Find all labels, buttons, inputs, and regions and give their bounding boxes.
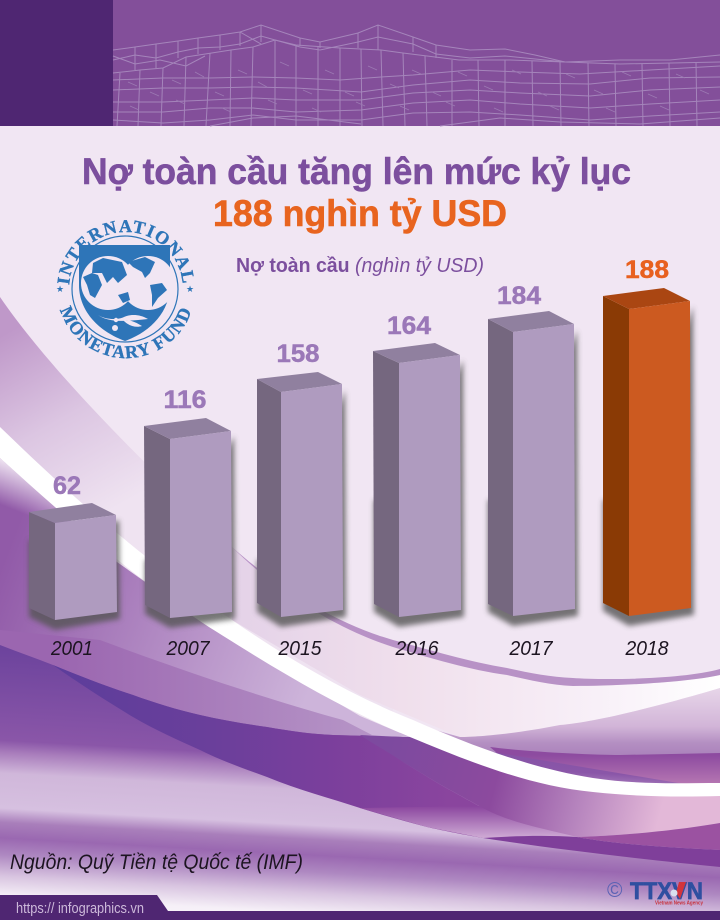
- year labels: 2001: [50, 638, 93, 660]
- bar 2007: [144, 418, 235, 628]
- website tab: [0, 895, 168, 911]
- source note: Nguồn: Quỹ Tiền tệ Quốc tế (IMF): [10, 851, 303, 874]
- icon: IMF logo: INTERNATIONAL: [57, 220, 194, 285]
- year labels: 2017: [509, 638, 553, 660]
- TTXVN logo: Vietnam News Agency: [655, 900, 703, 906]
- icon: IMF logo: ★: [186, 285, 194, 295]
- title: [82, 151, 631, 234]
- footer bar: [0, 895, 720, 920]
- value labels: 188: [625, 256, 669, 284]
- value labels: 116: [164, 386, 206, 414]
- icon: IMF logo: ★: [56, 285, 64, 295]
- bar 2001: [29, 503, 120, 630]
- value labels: 184: [497, 282, 541, 310]
- chart subtitle: Nợ toàn cầu (nghìn tỷ USD): [236, 255, 484, 277]
- header band: [0, 0, 720, 126]
- TTXVN logo: TTXVN: [630, 878, 703, 905]
- icon: IMF logo: MONETARY FUND: [60, 304, 190, 358]
- bar 2018: [603, 288, 694, 626]
- year labels: 2015: [278, 638, 322, 660]
- bar 2015: [257, 372, 346, 627]
- title line 1: Nợ toàn cầu tăng lên mức kỷ lục: [82, 151, 631, 192]
- TTXVN logo: [607, 878, 703, 906]
- value labels: 158: [276, 340, 320, 368]
- bar 2017: [488, 311, 578, 626]
- value labels: 62: [53, 472, 81, 500]
- year labels: 2018: [625, 638, 668, 660]
- dark header block: [0, 0, 113, 126]
- bar 2016: [373, 343, 464, 627]
- bar chart: [29, 256, 694, 660]
- title line 2: 188 nghìn tỷ USD: [213, 193, 507, 234]
- TTXVN logo: ©: [607, 879, 623, 902]
- website url: https:// infographics.vn: [16, 900, 144, 917]
- wireframe mountains pattern: [113, 25, 720, 126]
- value labels: 164: [387, 312, 431, 340]
- year labels: 2016: [395, 638, 439, 660]
- background swoosh waves: [0, 297, 720, 920]
- icon: IMF logo: [56, 220, 194, 358]
- year labels: [50, 638, 669, 660]
- year labels: 2007: [166, 638, 210, 660]
- value labels: [53, 256, 669, 500]
